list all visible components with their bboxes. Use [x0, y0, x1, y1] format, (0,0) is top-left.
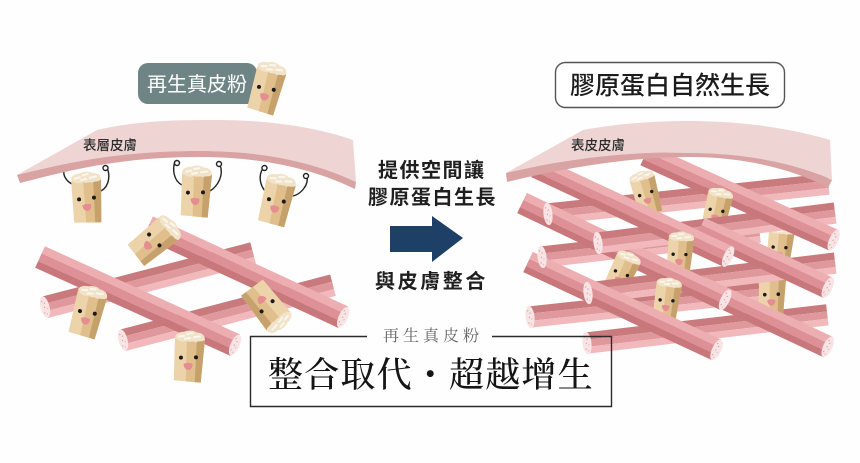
label: 膠原蛋白自然生長: 膠原蛋白自然生長 [570, 72, 770, 100]
text: 膠原蛋白生長: 膠原蛋白生長 [368, 186, 497, 209]
label: 再生真皮粉 [138, 63, 257, 104]
title box [250, 326, 612, 406]
skin label: left: 表層皮膚 [83, 137, 137, 153]
fibers: lower diagonal segment and end caps [536, 202, 725, 362]
skin layer: right [506, 121, 832, 188]
icon: peg on fibers top [126, 211, 185, 268]
icon: upside-down peg [240, 278, 295, 337]
skin layer: left [17, 120, 356, 189]
collagen fibers: left lattice [35, 216, 352, 358]
collagen fibers: right back layer [524, 145, 838, 355]
subtitle: 再生真皮粉 [383, 326, 483, 345]
main title: 整合取代・超越增生 [268, 356, 594, 395]
panel: right illustration [506, 62, 842, 362]
label: 膠原蛋白自然生長 [556, 62, 784, 108]
hanging peg arms [64, 160, 308, 196]
text: 提供空間讓: 提供空間讓 [378, 158, 486, 182]
icon: right peg 6 [758, 270, 786, 317]
fiber: long diagonal, left part [517, 193, 656, 275]
icon: hanging peg 3 [257, 171, 298, 228]
icon: right peg 1 [628, 168, 664, 217]
icon: right peg 2 [700, 185, 734, 234]
icon: peg below fibers [173, 330, 205, 383]
text: 與皮膚整合: 與皮膚整合 [375, 270, 488, 293]
skin label: right: 表皮皮膚 [571, 137, 625, 153]
fibers: topmost segments and end caps [645, 192, 842, 312]
icon: peg on fibers left [67, 283, 109, 340]
panel: center explanation [368, 158, 497, 293]
icon: right peg 3 [765, 223, 795, 270]
arrow [390, 216, 463, 262]
icon: right peg 7 [651, 276, 683, 323]
icon: hanging peg 1 [71, 171, 103, 224]
icon: right peg 4 [665, 230, 695, 276]
label: 再生真皮粉: 再生真皮粉 [147, 73, 247, 96]
icon: hanging peg 2 [180, 165, 212, 218]
icon: peg beside label [246, 59, 288, 116]
collagen fibers: right front layer [523, 157, 837, 362]
panel: left illustration [17, 59, 356, 383]
icon: right peg 5 [601, 247, 643, 298]
